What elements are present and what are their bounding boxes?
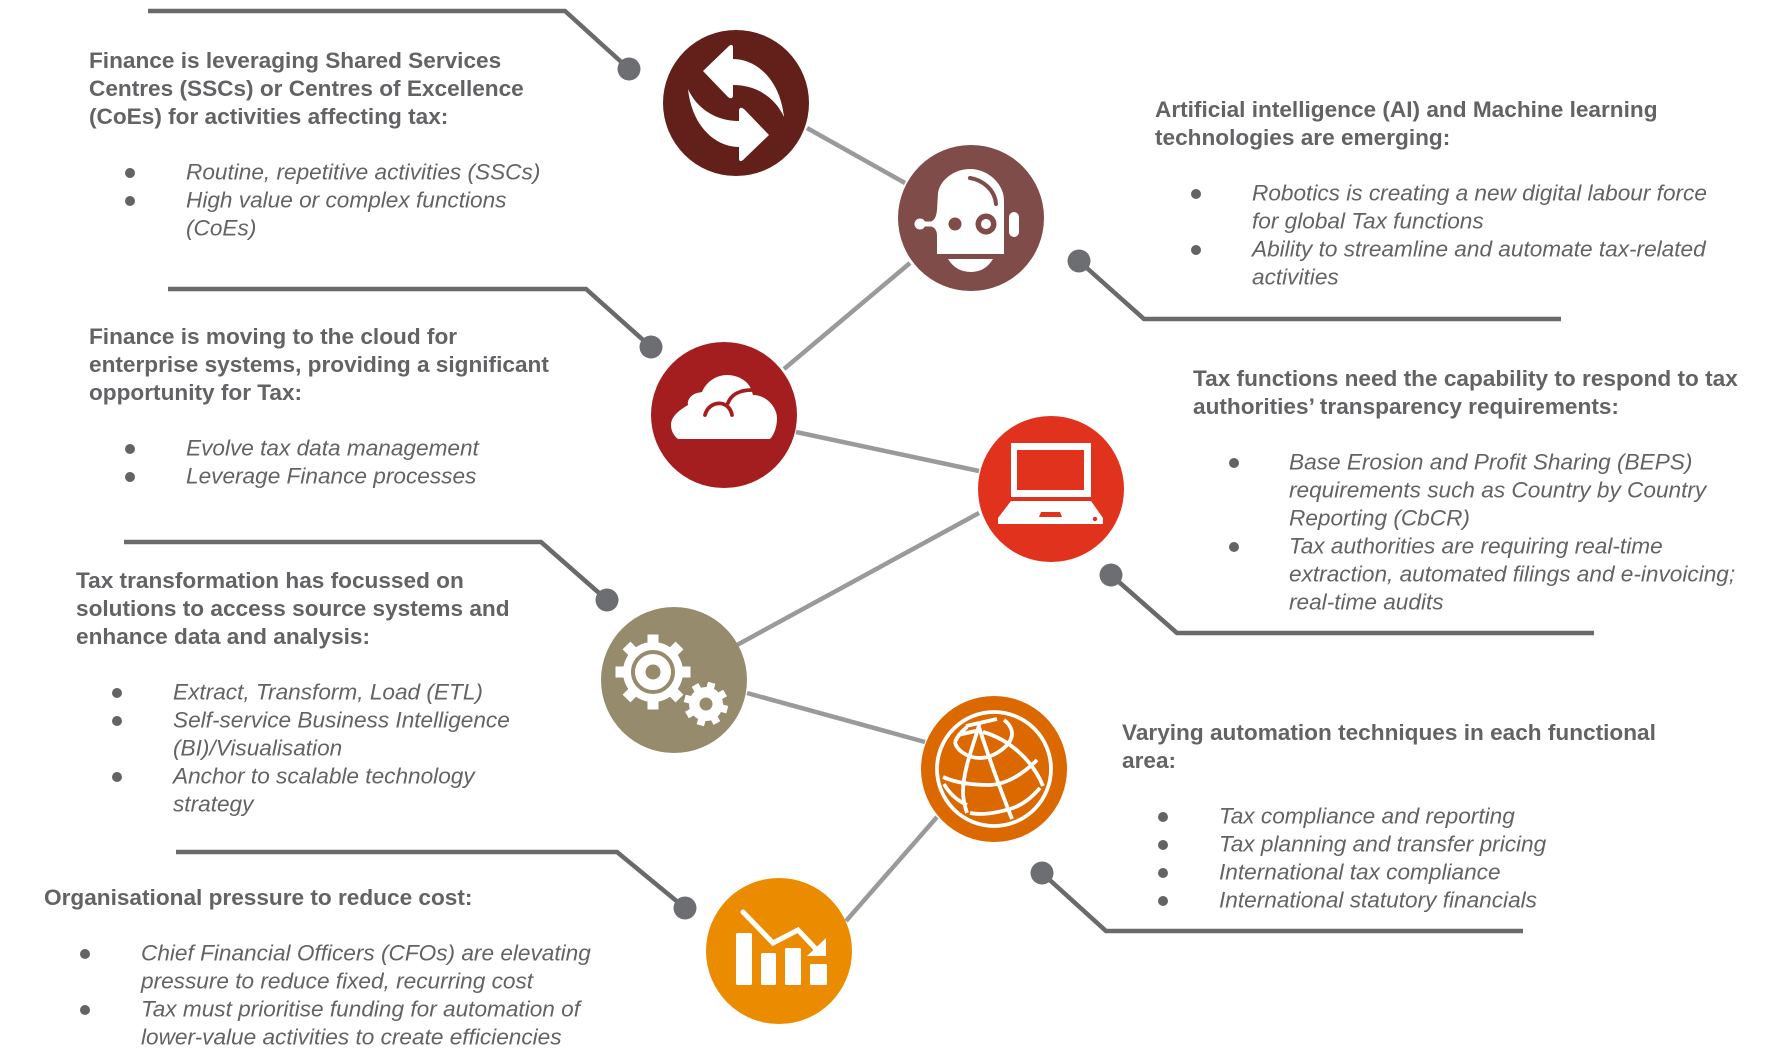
- text block: transparency: Base Erosion and Profit Sharing (BEPS): [1289, 449, 1692, 474]
- connector lines between icons: [737, 128, 979, 921]
- text block: data and analysis: [76, 568, 510, 816]
- text block: artificial intelligence: Robotics is creating a new digital labour force: [1252, 180, 1707, 205]
- text block: shared services: Routine, repetitive activities (SSCs): [186, 159, 540, 184]
- callout line: cloud: [168, 289, 662, 358]
- icon: robot head: [898, 145, 1044, 291]
- text block: cost pressure: [44, 885, 591, 1049]
- callout line: artificial intelligence: [1068, 250, 1561, 319]
- text block: automation techniques: International statutory financials: [1219, 887, 1537, 912]
- text block: data and analysis: strategy: [173, 791, 255, 816]
- text block: shared services: High value or complex functions: [186, 187, 506, 212]
- text block: artificial intelligence: for global Tax functions: [1252, 208, 1484, 233]
- text block: cloud: enterprise systems, providing a significant: [89, 352, 549, 377]
- text block: shared services: [89, 48, 540, 240]
- text block: cost pressure: Organisational pressure to reduce cost:: [44, 885, 472, 910]
- text block: artificial intelligence: technologies are emerging:: [1155, 125, 1450, 150]
- icon: globe: [921, 696, 1067, 842]
- icon: circular arrows: [663, 30, 809, 176]
- text block: data and analysis: Self-service Business Intelligence: [173, 707, 510, 732]
- text block: shared services: Centres (SSCs) or Centres of Excellence: [89, 76, 524, 101]
- text block: artificial intelligence: [1155, 97, 1707, 289]
- icon: laptop: [978, 416, 1124, 562]
- text block: automation techniques: Tax planning and transfer pricing: [1219, 831, 1547, 856]
- text block: automation techniques: International tax compliance: [1219, 859, 1501, 884]
- text block: cost pressure: pressure to reduce fixed, recurring cost: [140, 968, 535, 993]
- callout line: cost pressure: [176, 852, 696, 920]
- text block: transparency: Tax functions need the capability to respond to tax: [1193, 366, 1738, 391]
- text block: automation techniques: [1122, 720, 1656, 912]
- text block: automation techniques: Tax compliance and reporting: [1219, 803, 1515, 828]
- text block: automation techniques: Varying automation techniques in each functional: [1122, 720, 1656, 745]
- text block: data and analysis: Extract, Transform, Load (ETL): [173, 679, 483, 704]
- text block: cloud: Finance is moving to the cloud for: [89, 324, 457, 349]
- text block: transparency: requirements such as Country by Country: [1289, 477, 1708, 502]
- text block: automation techniques: area:: [1122, 748, 1176, 773]
- icon: declining bar chart: [706, 878, 852, 1024]
- text block: data and analysis: Anchor to scalable technology: [171, 763, 476, 788]
- text block: data and analysis: Tax transformation has focussed on: [76, 568, 464, 593]
- text block: transparency: Reporting (CbCR): [1289, 505, 1470, 530]
- text block: transparency: extraction, automated filings and e-invoicing;: [1289, 561, 1735, 586]
- text block: shared services: (CoEs): [186, 215, 256, 240]
- text block: artificial intelligence: activities: [1252, 264, 1339, 289]
- text block: cloud: [89, 324, 549, 488]
- text block: artificial intelligence: Artificial intelligence (AI) and Machine learning: [1155, 97, 1658, 122]
- text block: cost pressure: Tax must prioritise funding for automation of: [141, 996, 583, 1021]
- text block: transparency: Tax authorities are requiring real-time: [1289, 533, 1663, 558]
- text block: cloud: opportunity for Tax:: [89, 380, 302, 405]
- text block: cloud: Evolve tax data management: [186, 435, 481, 460]
- callout line: transparency: [1100, 564, 1594, 633]
- text block: shared services: (CoEs) for activities affecting tax:: [89, 104, 448, 129]
- callout line: automation: [1030, 862, 1523, 931]
- text block: transparency: authorities’ transparency requirements:: [1193, 394, 1619, 419]
- callout line: data and analysis: [124, 542, 618, 612]
- text block: transparency: [1193, 366, 1738, 614]
- text block: shared services: Finance is leveraging Shared Services: [89, 48, 501, 73]
- text block: cloud: Leverage Finance processes: [186, 463, 476, 488]
- text block: data and analysis: enhance data and analysis:: [76, 624, 370, 649]
- text block: artificial intelligence: Ability to streamline and automate tax-related: [1250, 236, 1707, 261]
- icon: cloud: [651, 342, 797, 488]
- text block: data and analysis: solutions to access source systems and: [76, 596, 510, 621]
- icon: gears: [601, 607, 747, 753]
- text block: transparency: real-time audits: [1289, 589, 1444, 614]
- text block: cost pressure: lower-value activities to create efficiencies: [141, 1024, 562, 1049]
- text block: cost pressure: Chief Financial Officers (CFOs) are elevating: [141, 940, 591, 965]
- callout line: shared services: [148, 11, 640, 80]
- text block: data and analysis: (BI)/Visualisation: [173, 735, 342, 760]
